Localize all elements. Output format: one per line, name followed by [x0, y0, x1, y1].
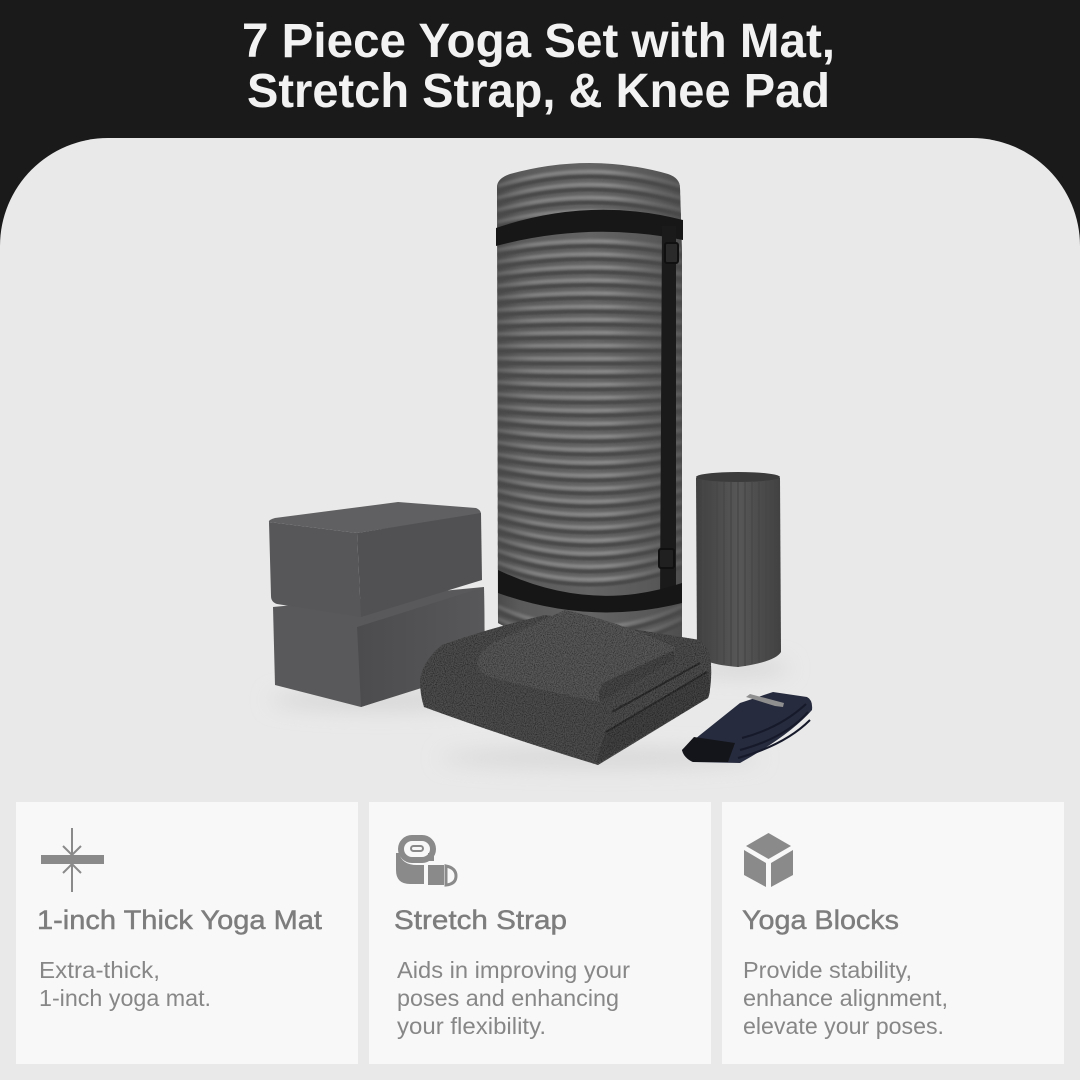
heading: 1-inch Thick Yoga Mat [37, 905, 323, 935]
description: enhance alignment, [743, 985, 948, 1011]
large towel [420, 615, 711, 765]
heading: Yoga Blocks [742, 905, 899, 935]
description: poses and enhancing [397, 985, 619, 1011]
yoga mat roll [496, 163, 683, 653]
mat bottom strap [498, 570, 682, 612]
title: 7 Piece Yoga Set with Mat, [242, 15, 835, 68]
description: your flexibility. [397, 1013, 546, 1039]
heading: Stretch Strap [394, 905, 567, 935]
description [743, 957, 948, 1039]
panel: stretch strap [369, 802, 711, 1064]
yoga block: bottom [273, 587, 485, 707]
strap metal slider [746, 694, 784, 707]
yoga block: top [269, 502, 482, 617]
small towel [477, 610, 675, 702]
mat vertical strap [660, 226, 676, 604]
description [397, 957, 630, 1039]
icon: thickness arrows [41, 828, 104, 892]
product photo: yoga set [269, 163, 812, 767]
description: Extra-thick, [39, 957, 160, 983]
mat top strap [496, 210, 683, 246]
icon: cube [744, 833, 793, 887]
floor shadow [270, 660, 790, 767]
panel: yoga blocks [722, 802, 1064, 1064]
description: Aids in improving your [397, 957, 630, 983]
mat upper buckle [665, 243, 678, 263]
description [39, 957, 211, 1011]
mat lower buckle [659, 549, 674, 568]
title: Stretch Strap, & Knee Pad [247, 65, 830, 118]
towels [420, 610, 711, 765]
stretch strap roll [682, 692, 812, 763]
description: 1-inch yoga mat. [39, 985, 211, 1011]
strap black buckle [682, 737, 735, 762]
title [242, 15, 835, 118]
description: Provide stability, [743, 957, 912, 983]
knee pad [696, 472, 781, 667]
description: elevate your poses. [743, 1013, 944, 1039]
icon: rolled strap [396, 838, 456, 885]
panel: 1-inch thick yoga mat [16, 802, 358, 1064]
